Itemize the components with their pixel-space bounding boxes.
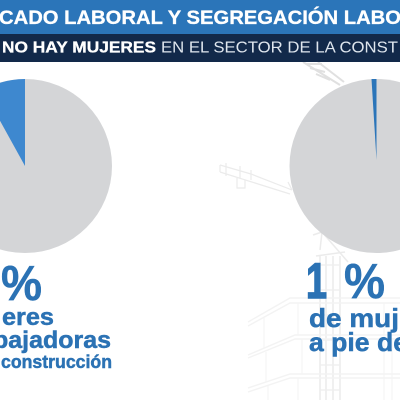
left statistic text (0, 257, 112, 372)
subtitle bold: NO HAY MUJERES (2, 40, 156, 57)
right label line 1: de muj (309, 303, 399, 333)
right number: 1 (306, 253, 327, 309)
left label line 3: construcción (1, 352, 112, 372)
building slabs (248, 298, 400, 392)
title: CADO LABORAL Y SEGREGACIÓN LABO (0, 5, 400, 29)
subtitle bar (0, 34, 400, 62)
title bar (0, 0, 400, 34)
left pie chart (0, 79, 112, 253)
left percent sign: % (1, 257, 42, 311)
right pie blue wedge (372, 79, 376, 160)
right percent sign: % (344, 255, 385, 309)
crane mast (313, 232, 348, 400)
left label line 1: eres (2, 304, 54, 331)
background illustration: crane and building (220, 62, 400, 400)
left pie blue wedge (0, 79, 25, 166)
right statistic text (306, 253, 400, 357)
crane counter jib (220, 163, 292, 194)
building columns (264, 303, 392, 400)
crane boom upper (303, 62, 344, 85)
subtitle regular: EN EL SECTOR DE LA CONST (161, 40, 398, 57)
right pie chart (290, 79, 400, 253)
